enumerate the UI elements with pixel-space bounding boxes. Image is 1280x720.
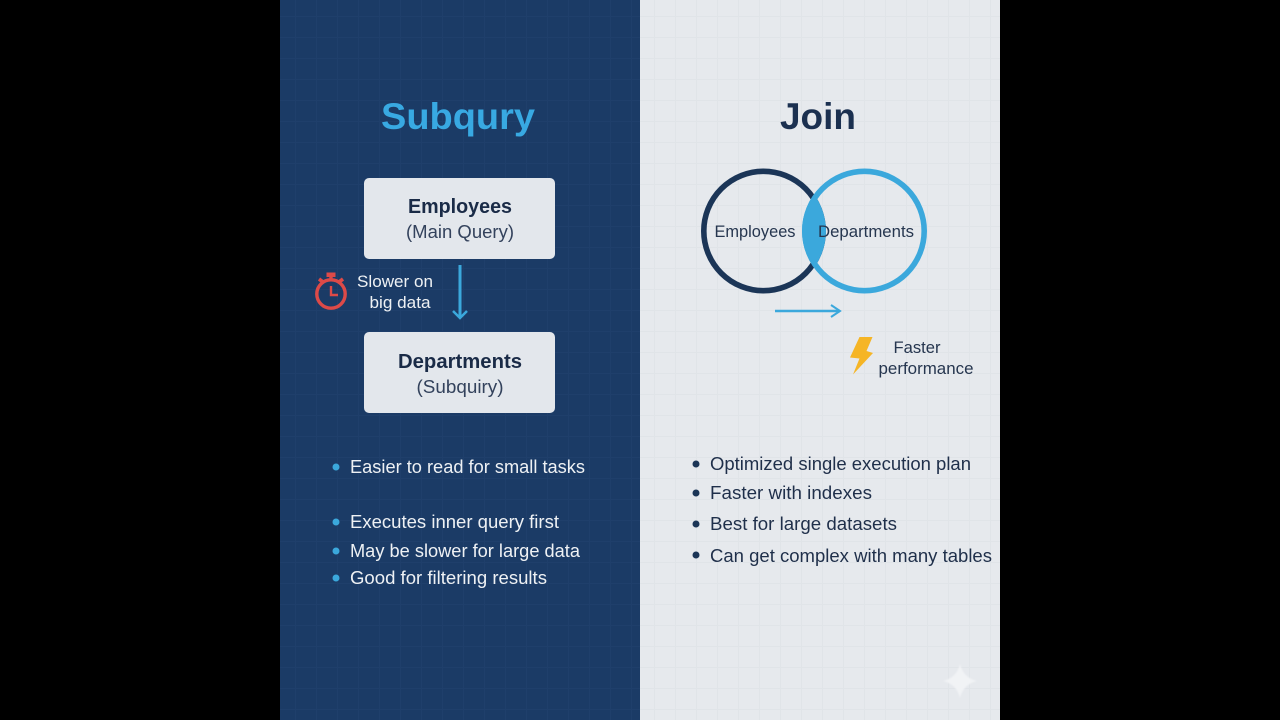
icon: sparkle watermark <box>943 664 977 698</box>
box: Employees main query: Employees <box>408 196 512 218</box>
venn diagram <box>704 168 927 294</box>
icon: stopwatch <box>317 273 345 308</box>
list: join points: Can get complex with many tables <box>710 546 992 566</box>
label: slower on big data: Slower on <box>357 273 433 291</box>
icon: lightning bolt <box>850 337 873 374</box>
list: join points: Optimized single execution plan <box>710 454 971 474</box>
label: faster performance: Faster <box>894 339 941 357</box>
heading: Join: Join <box>780 96 856 137</box>
label: faster performance: performance <box>878 360 974 378</box>
box: Departments subquery: Departments <box>398 351 522 373</box>
label: faster performance <box>878 339 974 378</box>
arrow: down <box>453 265 467 318</box>
list: join points <box>692 454 992 566</box>
panel: join <box>640 0 1000 720</box>
list: subquery points: Easier to read for small tasks <box>350 457 585 477</box>
box: Departments subquery: (Subquiry) <box>416 377 504 397</box>
box: Employees main query: (Main Query) <box>406 222 514 242</box>
label: slower on big data: big data <box>370 294 431 312</box>
list: join points: Faster with indexes <box>710 483 872 503</box>
arrow: right <box>775 305 840 317</box>
list: subquery points <box>332 457 585 588</box>
panel: subquery <box>280 0 640 720</box>
list: join points: Best for large datasets <box>710 514 897 534</box>
label: slower on big data <box>357 273 433 312</box>
venn diagram: Departments <box>818 223 914 241</box>
list: subquery points: Good for filtering results <box>350 568 547 588</box>
list: subquery points: May be slower for large data <box>350 541 581 561</box>
box: Employees main query <box>364 178 555 259</box>
list: subquery points: Executes inner query first <box>350 512 559 532</box>
venn diagram: Employees <box>714 223 796 241</box>
box: Departments subquery <box>364 332 555 413</box>
heading: Subqury: Subqury <box>381 96 535 137</box>
